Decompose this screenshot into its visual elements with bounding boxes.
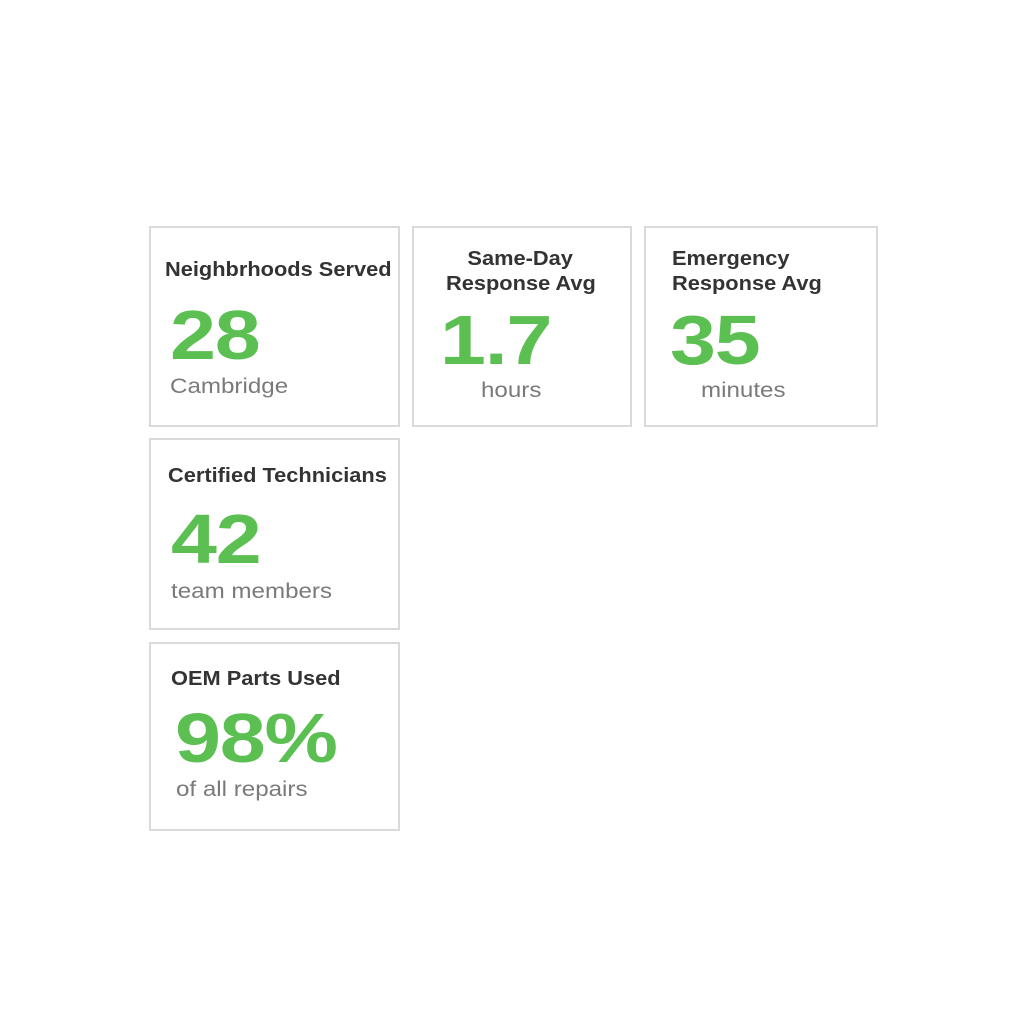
heading: Response Avg [446,273,596,295]
heading [672,248,822,295]
card: neighborhoods served [149,226,400,427]
heading: Certified Technicians [168,465,387,487]
subtext: team members [171,580,332,603]
subtext: Cambridge [170,375,288,398]
subtext: of all repairs [176,778,308,801]
subtext: hours [481,379,541,402]
heading: Neighbrhoods Served [165,259,392,281]
number: 42 [171,500,261,578]
card: emergency response [644,226,878,427]
heading: OEM Parts Used [171,668,341,690]
heading [446,248,596,295]
number: 35 [670,301,760,379]
card: certified technicians [149,438,400,630]
number: 28 [170,296,260,374]
card: OEM parts used [149,642,400,831]
heading: Emergency [672,248,790,270]
number: 1.7 [440,301,551,379]
heading: Response Avg [672,273,822,295]
heading: Same-Day [467,248,573,270]
subtext: minutes [701,379,786,402]
number: 98% [175,699,337,777]
card: same-day response [412,226,632,427]
